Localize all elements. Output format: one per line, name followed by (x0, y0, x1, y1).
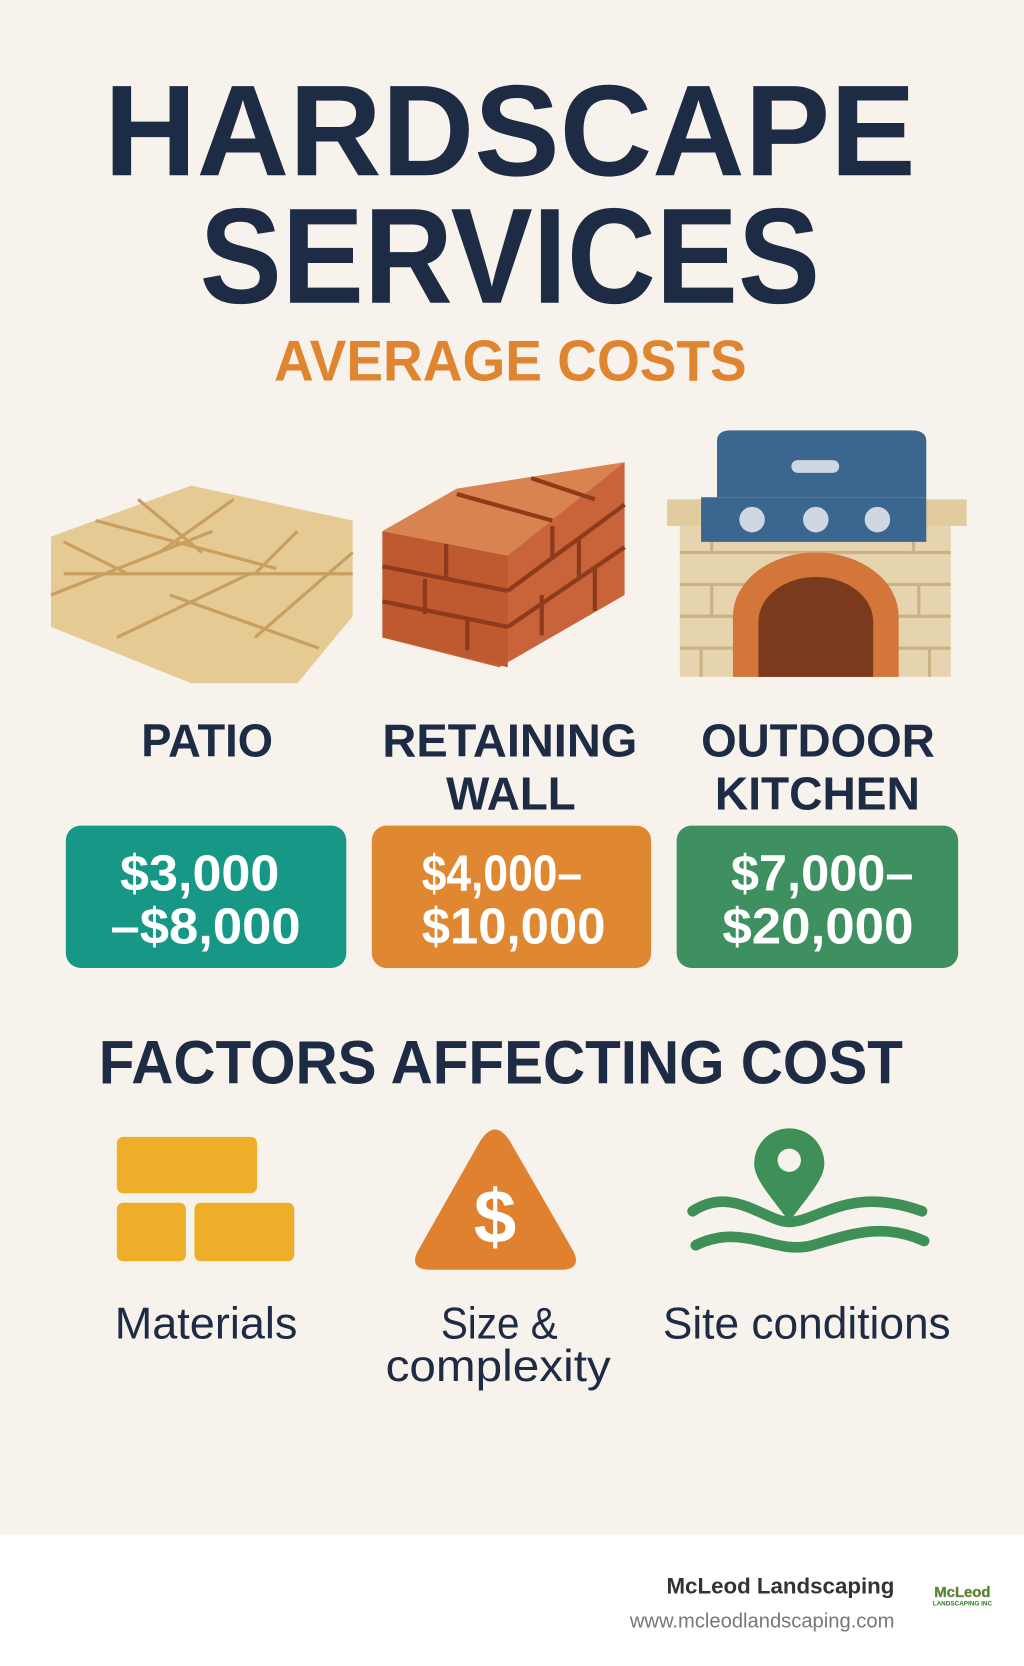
label: size & complexity: Size & (441, 1300, 558, 1349)
title: SERVICES (200, 180, 820, 332)
price box: patio: –$8,000 (110, 897, 301, 955)
price box: patio: $3,000 (120, 844, 279, 901)
logo: LANDSCAPING INC (933, 1600, 992, 1607)
icon: dollar triangle (415, 1129, 576, 1270)
price box: outdoor kitchen (677, 826, 958, 968)
footer: www.mcleodlandscaping.com (629, 1611, 894, 1633)
label: size & complexity (386, 1300, 612, 1391)
title (104, 59, 916, 332)
label: retaining wall (382, 714, 637, 820)
icon: dollar triangle: $ (474, 1175, 516, 1260)
icon: site pin and waves (693, 1128, 924, 1247)
price box: outdoor kitchen: $7,000– (731, 844, 914, 901)
price box: retaining wall: $10,000 (422, 897, 605, 955)
heading: factors: FACTORS AFFECTING COST (99, 1029, 903, 1098)
logo: McLeod (934, 1585, 990, 1601)
label: retaining wall: RETAINING (382, 714, 637, 767)
label: outdoor kitchen (701, 714, 935, 820)
label: retaining wall: WALL (446, 768, 576, 820)
icon: outdoor kitchen (667, 430, 967, 677)
label: materials: Materials (115, 1300, 297, 1349)
price box: retaining wall (372, 826, 651, 968)
label: outdoor kitchen: OUTDOOR (701, 714, 935, 767)
price box: outdoor kitchen: $20,000 (722, 897, 914, 955)
subtitle: AVERAGE COSTS (274, 329, 747, 393)
footer (0, 1535, 1024, 1666)
title: HARDSCAPE (104, 59, 916, 203)
label: patio: PATIO (141, 714, 273, 767)
footer: McLeod Landscaping (666, 1574, 894, 1599)
label: site conditions: Site conditions (663, 1300, 951, 1349)
icon: materials bricks (117, 1137, 294, 1261)
logo (933, 1585, 992, 1607)
price box: retaining wall: $4,000– (422, 844, 582, 901)
icon: retaining wall (382, 462, 625, 667)
label: size & complexity: complexity (386, 1342, 612, 1391)
price box: patio (66, 826, 346, 968)
label: outdoor kitchen: KITCHEN (715, 768, 920, 820)
icon: patio (51, 486, 353, 683)
